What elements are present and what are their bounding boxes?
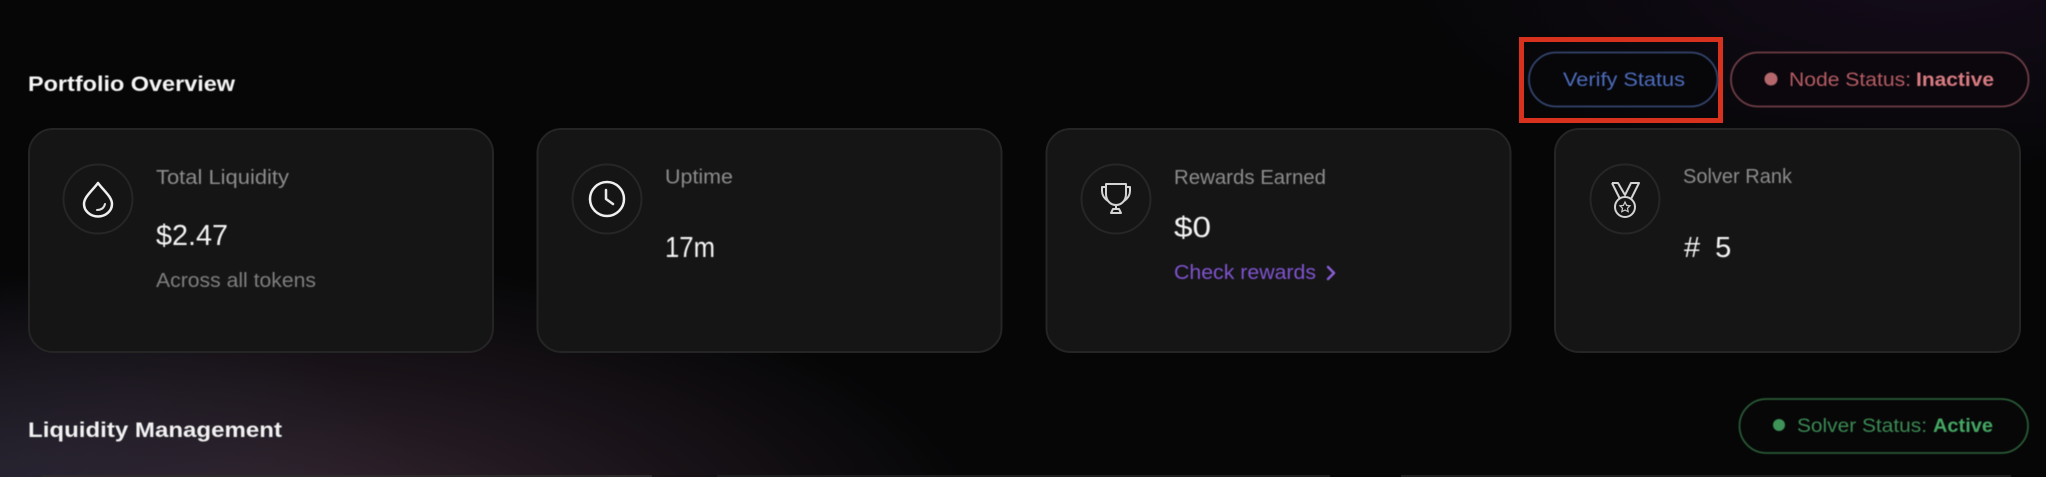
badge: Node Status Inactive: Node Status:: [1789, 70, 1911, 91]
value: $0: $0: [1174, 212, 1211, 244]
highlight box around Verify Status: [1522, 40, 1720, 120]
label: Uptime: Uptime: [665, 166, 733, 188]
badge: Solver Status Active: Solver Status:: [1797, 416, 1927, 437]
caption: Across all tokens: Across all tokens: [156, 270, 316, 292]
badge: Solver Status Active: [1740, 399, 2028, 453]
heading: Liquidity Management: Liquidity Management: [28, 419, 282, 442]
panel: lower card right (cropped): [1401, 475, 2011, 477]
label: Solver Rank: Solver Rank: [1683, 166, 1793, 188]
panel: Uptime: [538, 129, 1002, 352]
icon: trophy: [1082, 164, 1150, 234]
value: # 5: # 5: [1684, 232, 1731, 264]
heading: Portfolio Overview: Portfolio Overview: [28, 73, 236, 96]
badge: Node Status Inactive: [1731, 52, 2028, 106]
panel: lower card middle (cropped): [717, 475, 1330, 477]
badge: Solver Status Active: Active: [1933, 416, 1993, 437]
badge: Node Status Inactive: Inactive: [1916, 70, 1994, 91]
icon: medal: [1590, 164, 1660, 234]
value: 17m: 17m: [665, 232, 715, 264]
panel: Rewards Earned: [1046, 129, 1510, 352]
button: Verify Status: Verify Status: [1563, 70, 1685, 91]
icon: clock: [572, 164, 642, 234]
value: $2.47: $2.47: [156, 220, 228, 252]
icon: water drop: [64, 164, 132, 234]
label: Total Liquidity: Total Liquidity: [156, 167, 289, 189]
panel: Total Liquidity: [29, 129, 493, 352]
link: Check rewards: Check rewards: [1174, 262, 1316, 284]
label: Rewards Earned: Rewards Earned: [1174, 167, 1326, 189]
panel: Solver Rank: [1555, 129, 2020, 352]
button: Verify Status: [1529, 52, 1718, 106]
panel: lower card left (cropped): [42, 475, 652, 477]
